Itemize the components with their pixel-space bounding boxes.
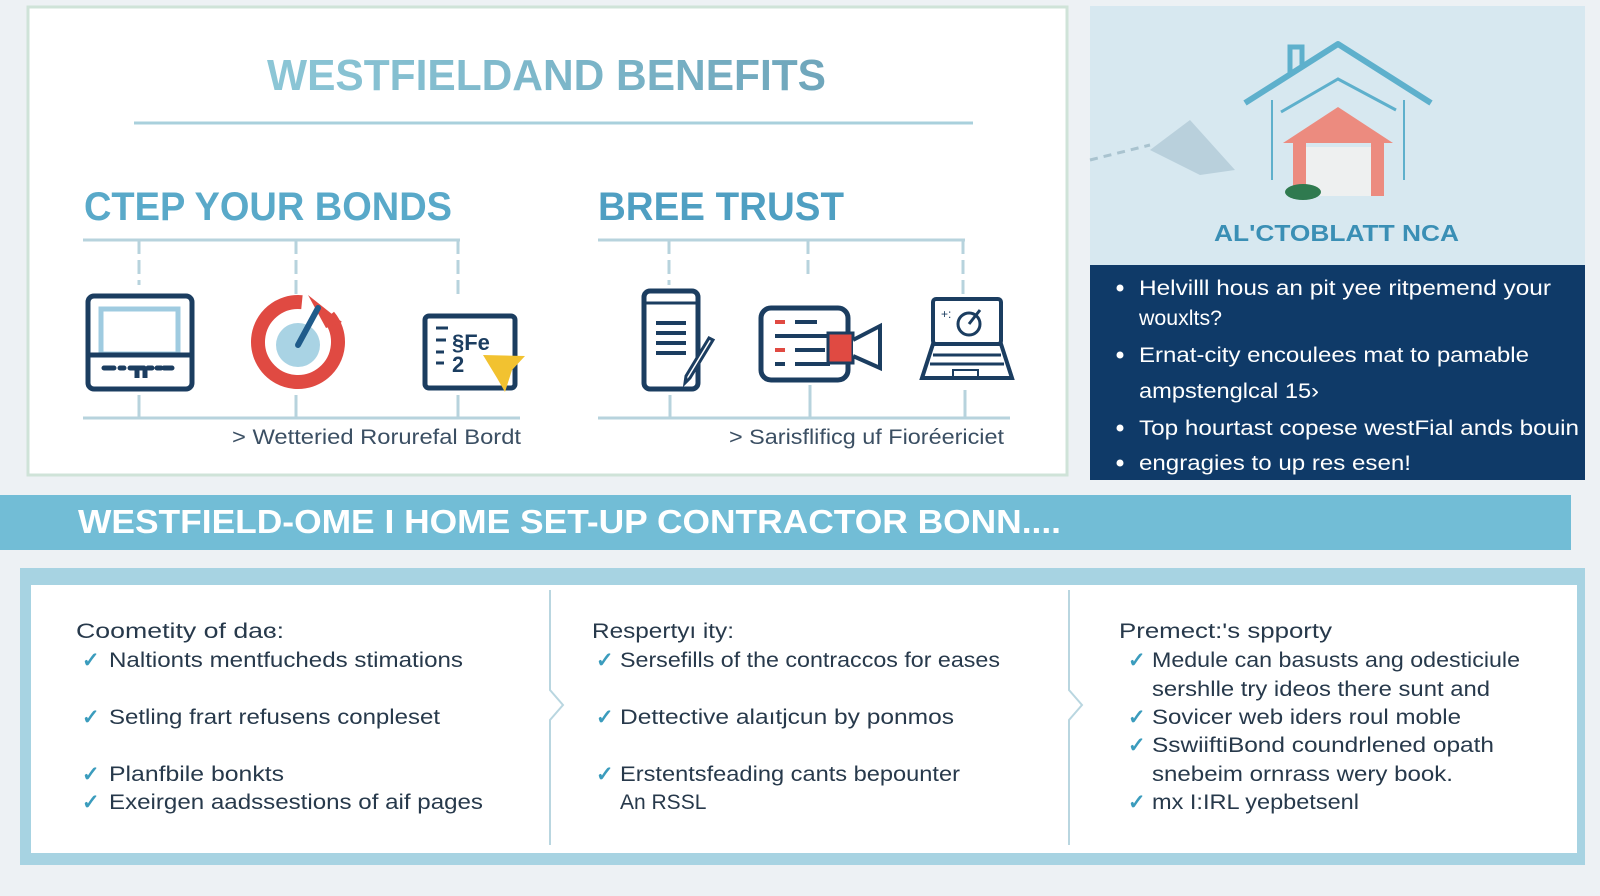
panel: navy bullet list: engragies to up res esen! <box>1139 452 1411 475</box>
column 3: Medule can basusts ang odesticiule <box>1152 649 1520 672</box>
column 3: ✓ <box>1128 649 1146 672</box>
column 3 <box>1119 620 1520 814</box>
icon: video presentation <box>761 308 880 380</box>
column 2: ✓ <box>596 763 614 786</box>
column 3: Sovicer web iders roul moble <box>1152 706 1461 729</box>
column 3: SswiiftiBond coundrlened opath <box>1152 734 1494 757</box>
heading: ctep your bonds: CTEP YOUR BONDS <box>84 185 452 229</box>
column 1: Exeirgen aadssestions of aif pages <box>109 791 483 814</box>
column 1: Coometity of daɞ: <box>76 620 284 643</box>
column 2: ✓ <box>596 649 614 672</box>
panel: navy bullet list: Helvilll hous an pit yee ritpemend your <box>1139 277 1551 300</box>
column 2: Sersefills of the contraccos for eases <box>620 649 1000 672</box>
column 1: Naltionts mentfucheds stimations <box>109 649 463 672</box>
icon: document with cursor <box>425 316 525 392</box>
column 3: Premect:'s spporty <box>1119 620 1333 643</box>
column 1: ✓ <box>82 791 100 814</box>
heading: bree trust: BREE TRUST <box>598 185 844 229</box>
panel: navy bullet list: Top hourtast copese westFial ands bouin <box>1139 417 1579 440</box>
column 3: ✓ <box>1128 706 1146 729</box>
icon: document with cursor: §Fe <box>452 330 490 355</box>
panel: navy bullet list <box>1090 265 1585 480</box>
title: WESTFIELDAND BENEFITS <box>267 51 826 100</box>
banner: WESTFIELD-OME I HOME SET-UP CONTRACTOR BONN.... <box>78 503 1061 540</box>
column 3: snebeim ornrass wery book. <box>1152 763 1453 786</box>
banner <box>0 495 1571 550</box>
column 2: Dettective alaıtjcun by ponmos <box>620 706 954 729</box>
column 1: Setling frart refusens conpleset <box>109 706 440 729</box>
column 2: Respertyı ity: <box>592 620 734 643</box>
tree lines left <box>83 240 1010 418</box>
icon: laptop screen <box>88 296 192 389</box>
column 3: ✓ <box>1128 791 1146 814</box>
icon: document with cursor: 2 <box>452 352 464 377</box>
icon: phone with pen <box>644 291 713 389</box>
column 1 <box>76 620 483 814</box>
column 1: Planfbile bonkts <box>109 763 284 786</box>
column 2: An RSSL <box>620 791 706 814</box>
column 1: ✓ <box>82 763 100 786</box>
panel: bottom three columns <box>20 568 1585 865</box>
column 3: mx I:IRL yepbetsenl <box>1152 791 1359 814</box>
panel: navy bullet list: ampstenglcal 15› <box>1139 380 1319 403</box>
icon: laptop with target: +: <box>941 307 951 321</box>
panel: top-left benefits <box>28 7 1067 475</box>
panel: right house <box>1090 6 1585 268</box>
caption right: > Sarisflificg uf Fioréericiet <box>729 426 1004 449</box>
column 3: ✓ <box>1128 734 1146 757</box>
icon: house <box>1090 44 1431 200</box>
column 2: ✓ <box>596 706 614 729</box>
panel: navy bullet list: wouxlts? <box>1138 307 1222 330</box>
column 2: Erstentsfeading cants bepounter <box>620 763 960 786</box>
column 3: sershlle try ideos there sunt and <box>1152 678 1490 701</box>
column 1: ✓ <box>82 649 100 672</box>
panel: navy bullet list: Ernat-city encoulees mat to pamable <box>1139 344 1529 367</box>
column 1: ✓ <box>82 706 100 729</box>
icon: laptop with target <box>922 299 1012 378</box>
right title: AL'CTOBLATT NCA <box>1214 220 1459 246</box>
column 2 <box>592 620 1000 814</box>
icon: gauge <box>242 286 354 398</box>
caption left: > Wetteried Rorurefal Bordt <box>232 426 521 449</box>
